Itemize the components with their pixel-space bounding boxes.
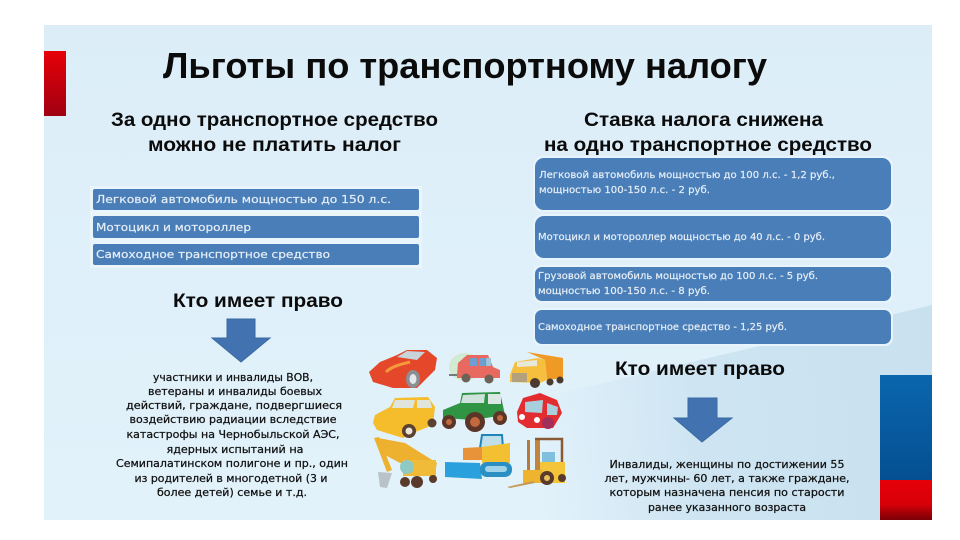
rate: truck: Грузовой автомобиль мощностью до 100 л.с. - 5 руб. — [538, 271, 818, 282]
right arrow — [674, 398, 732, 442]
left text block: катастрофы на Чернобыльской АЭС, — [126, 429, 340, 441]
right text block: Инвалиды, женщины по достижении 55 — [610, 459, 844, 471]
rate: truck: мощностью 100-150 л.с. - 8 руб. — [538, 286, 710, 297]
list item: motorcycle — [93, 216, 419, 238]
red accent bar — [44, 51, 66, 116]
rate: self-propelled — [533, 308, 893, 346]
icon: forklift — [507, 439, 566, 488]
icon: red sports car — [369, 350, 437, 388]
left text block: из родителей в многодетной (3 и — [134, 473, 328, 485]
left heading — [111, 109, 438, 156]
left text block: ядерных испытаний на — [166, 444, 304, 456]
icon: green jeep — [442, 392, 507, 432]
right text block: ранее указанного возраста — [648, 502, 806, 514]
rate: car — [533, 156, 893, 212]
left text block: Семипалатинском полигоне и пр., один — [116, 458, 348, 470]
vehicle illustrations — [369, 350, 566, 488]
left text block: действий, граждане, подвергшиеся — [126, 400, 342, 412]
right text block — [604, 459, 850, 514]
icon: pink car — [449, 353, 500, 384]
icon: red small car — [517, 393, 562, 429]
rate: car: Легковой автомобиль мощностью до 100 л.с. - 1,2 руб., — [539, 170, 835, 181]
list item: self-propelled — [93, 244, 419, 265]
list item: motorcycle: Мотоцикл и мотороллер — [96, 221, 251, 234]
icon: excavator — [374, 437, 437, 488]
list item: self-propelled: Самоходное транспортное средство — [96, 248, 330, 261]
icon: orange truck — [510, 352, 564, 388]
left text block: ветераны и инвалиды боевых — [148, 386, 322, 398]
rate: car: мощностью 100-150 л.с. - 2 руб. — [539, 185, 710, 196]
right heading: Ставка налога снижена — [584, 109, 823, 131]
rate: truck — [533, 265, 893, 303]
icon: bulldozer — [445, 435, 512, 479]
left text block: участники и инвалиды ВОВ, — [153, 372, 313, 384]
right heading — [544, 109, 872, 156]
left subheading: Кто имеет право — [173, 290, 343, 312]
left text block: более детей) семье и т.д. — [157, 487, 307, 499]
flag block — [880, 375, 932, 520]
right text block: лет, мужчины- 60 лет, а также граждане, — [604, 473, 850, 485]
list item: car: Легковой автомобиль мощностью до 150 л.с. — [96, 193, 391, 206]
left heading: За одно транспортное средство — [111, 109, 438, 131]
right list panel — [533, 156, 893, 346]
list item: car — [93, 189, 419, 210]
left arrow — [212, 319, 270, 362]
right subheading: Кто имеет право — [615, 358, 785, 380]
left text block: воздействию радиации вследствие — [130, 414, 336, 426]
title: Льготы по транспортному налогу — [163, 45, 767, 86]
left text block — [116, 372, 348, 499]
icon: yellow car — [373, 397, 436, 438]
left list panel — [90, 186, 422, 268]
right heading: на одно транспортное средство — [544, 134, 872, 156]
rate: motorcycle — [533, 214, 893, 260]
rate: self-propelled: Самоходное транспортное средство - 1,25 руб. — [538, 322, 787, 333]
right text block: которым назначена пенсия по старости — [610, 487, 844, 499]
rate: motorcycle: Мотоцикл и мотороллер мощностью до 40 л.с. - 0 руб. — [538, 232, 825, 243]
left heading: можно не платить налог — [148, 134, 401, 156]
